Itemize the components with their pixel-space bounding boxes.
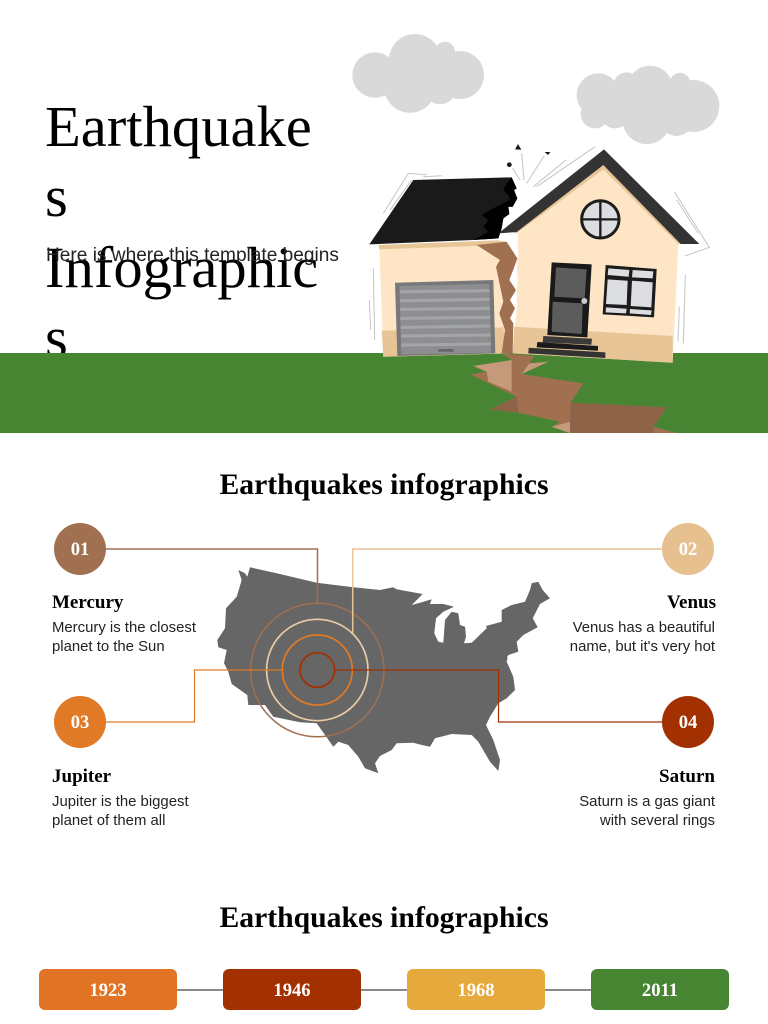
map with epicentre rings and leader lines (106, 548, 662, 774)
text: Jupiter: planet of them all (52, 813, 165, 829)
timeline connector (177, 988, 591, 990)
marker 01: 01 (71, 539, 89, 560)
text: Venus: Venus has a beautiful (573, 620, 715, 636)
text: Mercury: planet to the Sun (52, 639, 165, 655)
leader line 03 (100, 670, 283, 722)
marker 02 (662, 523, 714, 575)
timeline 1968 (407, 969, 545, 1010)
shake lines (369, 147, 709, 343)
text: Venus: name, but it's very hot (570, 639, 715, 655)
green ground band (0, 353, 768, 433)
round window (582, 201, 619, 238)
window (603, 265, 657, 317)
marker 03: 03 (71, 712, 89, 733)
left roof (369, 177, 517, 244)
leader line 01 (100, 549, 318, 603)
subtitle: Here is where this template begins (46, 245, 339, 266)
timeline 1968: 1968 (457, 980, 495, 1001)
front steps (528, 336, 605, 358)
label: Mercury: Mercury (52, 592, 123, 613)
marker 04: 04 (679, 712, 697, 733)
ground crack (470, 353, 677, 433)
house walls (378, 167, 678, 363)
icon: flying debris (507, 144, 550, 167)
text: Mercury (52, 620, 196, 655)
icon: left cloud (352, 34, 484, 113)
timeline 1923 (39, 969, 177, 1010)
text: Saturn (579, 794, 715, 829)
leader line 04 (335, 670, 668, 722)
text: Mercury: Mercury is the closest (52, 620, 196, 636)
marker 04 (662, 696, 714, 748)
timeline 2011 (591, 969, 729, 1010)
timeline 2011: 2011 (642, 980, 678, 1001)
door (547, 262, 592, 337)
label: Saturn: Saturn (659, 766, 715, 787)
marker 03 (54, 696, 106, 748)
label: Jupiter: Jupiter (52, 766, 111, 787)
heading: timeline section: Earthquakes infographics (219, 902, 549, 934)
leader line 02 (353, 549, 668, 634)
USA map (217, 567, 550, 773)
timeline 1946: 1946 (273, 980, 311, 1001)
illustration: cracked house with clouds (352, 34, 720, 433)
text: Jupiter (52, 794, 189, 829)
marker 02: 02 (679, 539, 697, 560)
heading: map section: Earthquakes infographics (219, 469, 549, 501)
epicentre rings (251, 603, 384, 737)
right roof (498, 149, 699, 244)
marker 01 (54, 523, 106, 575)
text: Venus (570, 620, 715, 655)
label: Venus: Venus (667, 592, 716, 613)
timeline 1923: 1923 (89, 980, 127, 1001)
text: Saturn: with several rings (600, 813, 715, 829)
timeline 1946 (223, 969, 361, 1010)
text: Saturn: Saturn is a gas giant (579, 794, 715, 810)
text: Jupiter: Jupiter is the biggest (52, 794, 189, 810)
garage door (395, 280, 495, 356)
title: Earthquakes Infographics (45, 94, 318, 370)
icon: right cloud (577, 66, 719, 144)
wall crack (477, 233, 518, 353)
